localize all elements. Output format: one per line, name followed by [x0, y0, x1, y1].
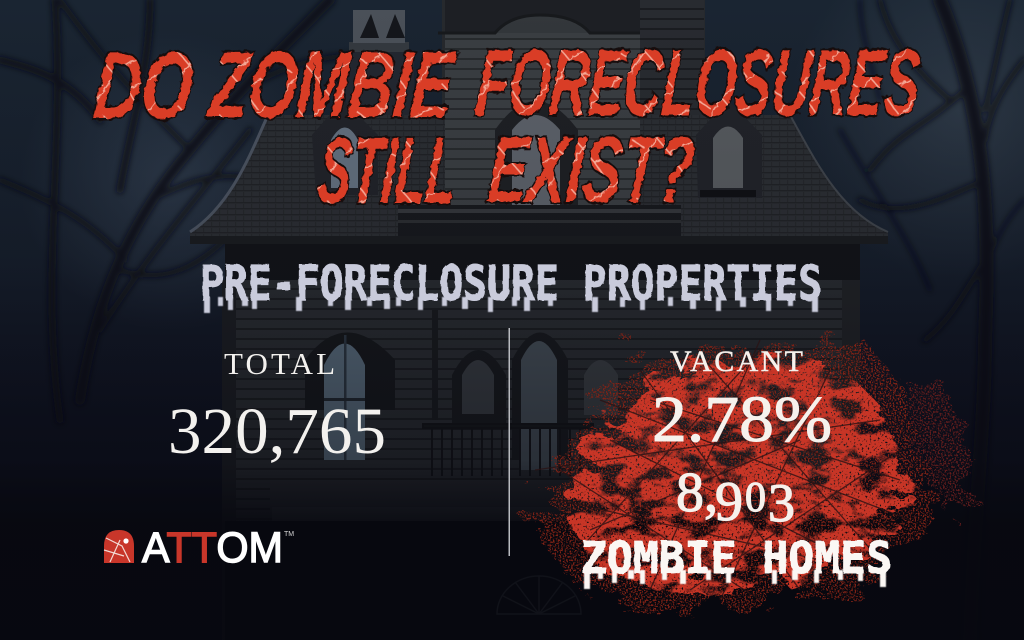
house: central gable band: [398, 205, 681, 237]
house: facade: [225, 280, 860, 640]
title: [90, 30, 924, 223]
house: right arched window: [584, 360, 618, 415]
house: cornice: [190, 236, 888, 244]
house: dormer window left: [312, 100, 378, 195]
ATTOM logo: [104, 524, 294, 572]
stat value: zombie homes count: 0: [745, 475, 766, 521]
house: porch interior: [225, 521, 860, 640]
splatter: right streaks: [905, 380, 975, 520]
title line 2: [314, 117, 698, 223]
wordmark: TM: [284, 531, 294, 538]
title line 2: STILL: [314, 118, 461, 223]
splatter: bright inner layer: [565, 362, 905, 590]
title line 1: ZOMBIE: [204, 32, 460, 137]
house: tower: [438, 0, 705, 240]
house: fanlight over door: [497, 576, 581, 614]
stat: total: [168, 346, 386, 468]
house: mansard roof: [190, 115, 888, 242]
stat value: zombie homes count: 8: [676, 462, 704, 524]
stat value: zombie homes count: ,: [704, 462, 718, 524]
icon: attom mark: [104, 530, 134, 563]
wordmark: ATTOM: [142, 524, 283, 572]
house: small cupola: [346, 10, 414, 122]
stat label: vacant: VACANT: [670, 345, 803, 378]
title line 1: DO: [90, 33, 197, 138]
stat value: zombie homes count: 9: [715, 471, 743, 533]
heading: pre-foreclosure properties: PRE-FORECLOSURE PROPERTIES: [200, 256, 822, 312]
house: porch roof: [270, 480, 600, 512]
house: dormer window right: [696, 100, 762, 198]
house: small arched window: [452, 350, 506, 430]
title line 1: [90, 30, 924, 138]
stat label: total: TOTAL: [224, 346, 335, 381]
red blood splatter panel: [535, 340, 975, 612]
splatter: grainy outer layer: [535, 340, 935, 612]
house: centre tower window: [495, 101, 578, 205]
stat value: vacant percent: 2.78%: [652, 383, 832, 456]
splatter dark scratches: [535, 340, 910, 600]
label: zombie homes: ZOMBIE HOMES: [581, 533, 892, 584]
house: balcony: [423, 424, 593, 476]
stat value: zombie homes count: 3: [768, 473, 795, 533]
divider line: [508, 328, 510, 556]
haunted house: [190, 0, 888, 640]
house: left tall window: [305, 332, 395, 460]
house: porch columns: [222, 280, 236, 640]
stat: vacant: [652, 345, 832, 533]
stat value: total: 320,765: [168, 395, 386, 468]
title line 2: EXIST?: [484, 117, 698, 222]
house: central arched window: [512, 332, 568, 470]
